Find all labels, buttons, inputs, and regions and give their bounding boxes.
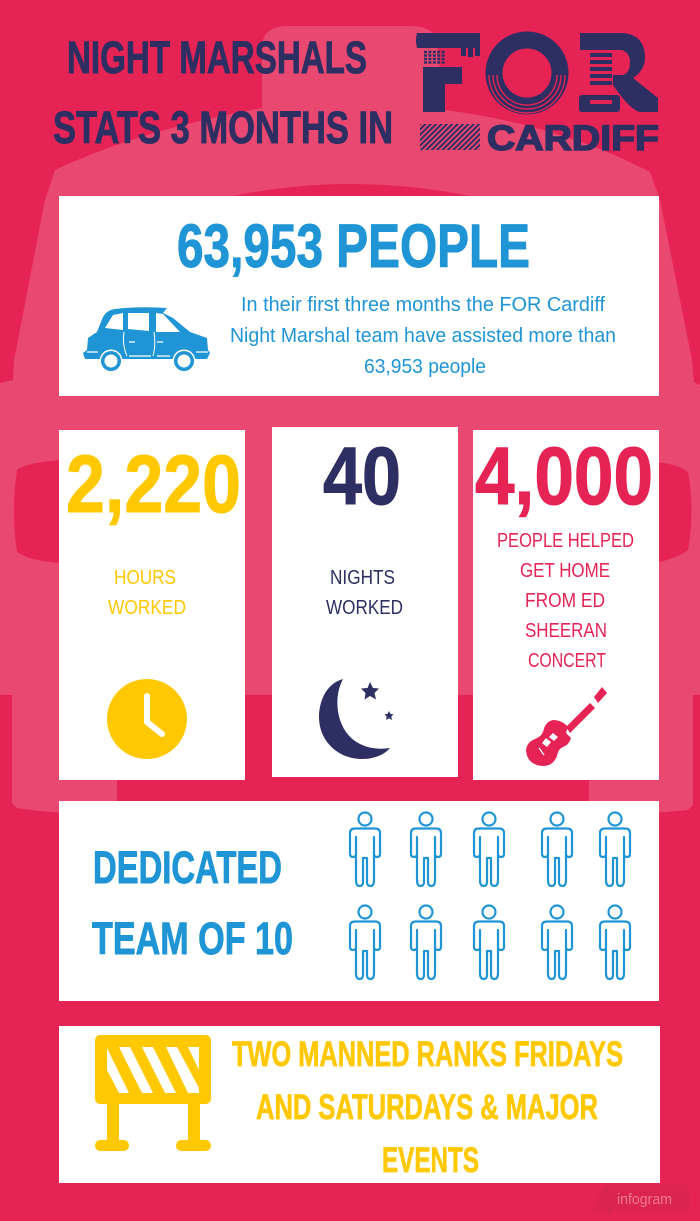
heading: 63,953 people: 63,953 PEOPLE [177,212,530,280]
panel: nights worked: 40 [323,431,401,522]
panel: people helped: GET HOME [520,560,610,582]
panel: hours worked: HOURS [114,567,176,589]
panel: dedicated team: TEAM OF 10 [92,913,293,964]
description: In their first three months the FOR Cardiff [241,294,605,316]
icon: guitar [526,687,607,766]
panel: nights worked [272,427,458,777]
title: STATS 3 MONTHS IN [53,102,393,153]
panel: 63,953 people [59,196,659,396]
panel: people helped: PEOPLE HELPED [497,530,634,552]
panel: people helped [473,430,659,780]
icon: taxi [83,307,210,372]
panel: two manned ranks [59,1026,660,1183]
icon: clock [107,679,187,759]
title: NIGHT MARSHALS [67,32,367,83]
panel: nights worked: WORKED [326,597,403,619]
infogram badge: infogram [617,1191,672,1208]
panel: people helped: 4,000 [475,431,653,522]
background taxi silhouette [0,26,700,814]
panel: people helped: SHEERAN [525,620,607,642]
icon: road barrier [95,1035,211,1151]
panel: two manned ranks: EVENTS [382,1141,479,1180]
panel: people helped: CONCERT [528,650,606,672]
description: 63,953 people [364,356,486,378]
title [53,32,393,153]
panel: hours worked [59,430,245,780]
panel: people helped: FROM ED [525,590,605,612]
panel: nights worked: NIGHTS [330,567,395,589]
panel: dedicated team [59,801,659,1001]
icon: moon and stars [319,679,394,759]
logo: FOR Cardiff: CARDIFF [487,119,659,158]
icon group: ten people [350,812,630,979]
panel: hours worked: WORKED [108,597,186,619]
panel: hours worked: 2,220 [66,439,241,530]
description: Night Marshal team have assisted more than [230,325,616,347]
panel: dedicated team: DEDICATED [93,842,282,893]
logo: FOR Cardiff [416,33,659,158]
description [230,294,616,378]
infogram badge [593,1185,689,1221]
